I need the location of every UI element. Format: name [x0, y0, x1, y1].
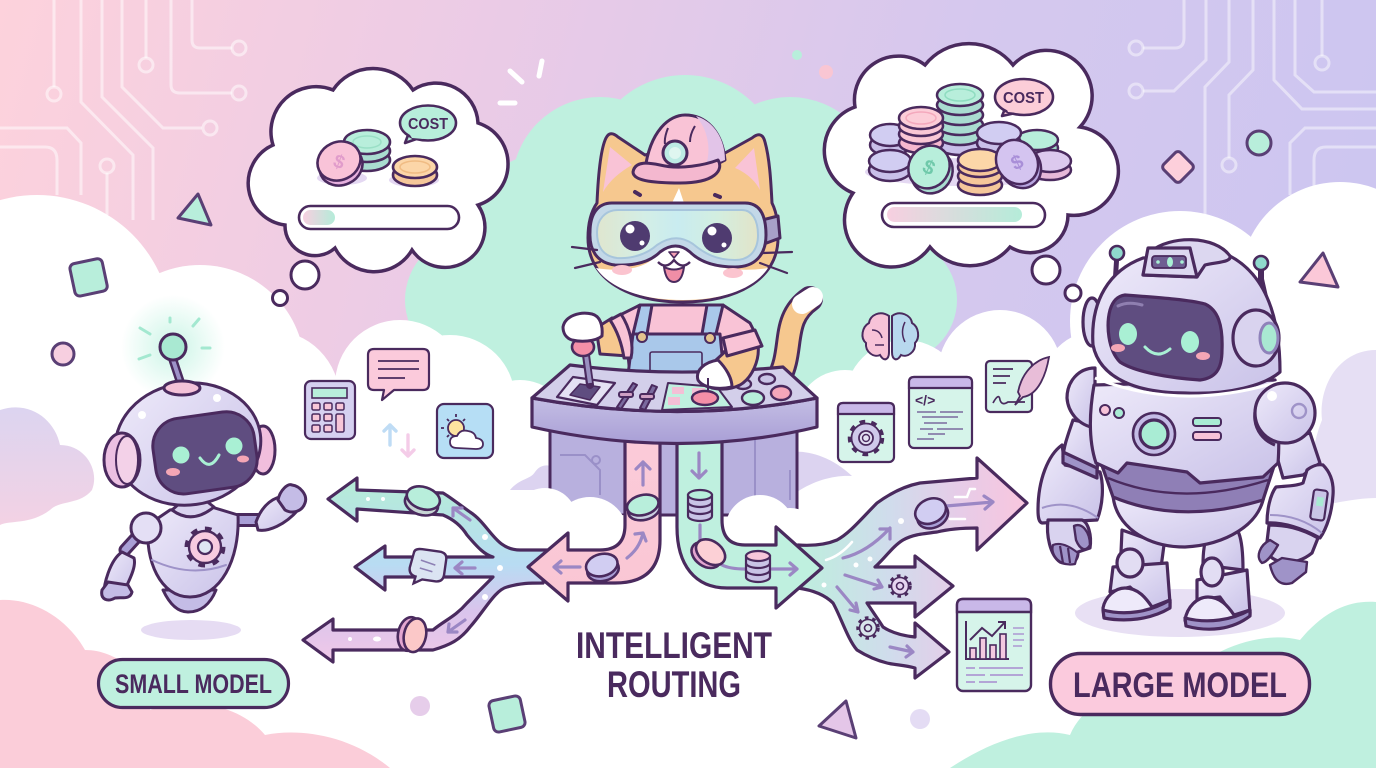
flow arrows: [837, 496, 993, 657]
console top: [532, 365, 817, 412]
circuit traces: top right: [1129, 0, 1376, 215]
triangle lavender bottom: [819, 701, 856, 738]
icon: code window: </>: [915, 392, 935, 408]
small coin pile: [311, 130, 439, 193]
pink route from console to left: [528, 425, 662, 601]
antenna: [173, 360, 181, 384]
antennas: [1115, 253, 1117, 285]
icon: calculator: [305, 381, 355, 439]
thought tail circles: left: [272, 261, 319, 306]
head dome: [1093, 255, 1280, 393]
sliders: [617, 383, 657, 410]
whiskers: [572, 247, 792, 273]
decorative shapes: [52, 131, 1338, 738]
small coin pile: $: [330, 151, 348, 174]
coin lavender: [911, 493, 952, 533]
coin lavender on pink route: [584, 550, 621, 584]
cost bar low: [299, 206, 459, 229]
title: intelligent routing: [576, 625, 772, 705]
icon: weather: [437, 404, 493, 458]
sparkles: [822, 489, 975, 588]
right headphone: [1233, 310, 1279, 366]
left routing branches: [303, 478, 547, 662]
ear right: [251, 426, 275, 474]
face: [1111, 257, 1277, 401]
torso: [148, 505, 238, 597]
large coin pile: $: [1008, 151, 1027, 175]
label: small model: SMALL MODEL: [115, 669, 272, 699]
mint centre cloud: [405, 75, 957, 420]
title: intelligent routing: ROUTING: [607, 664, 741, 705]
label: small model: [98, 660, 288, 708]
head: [107, 373, 269, 515]
right leg: [1203, 523, 1243, 570]
control screen: [662, 383, 732, 410]
flow arrows: [448, 508, 475, 632]
triangle mint left: [178, 194, 211, 225]
thought tail circles: right: [1032, 256, 1081, 301]
visor: [1108, 295, 1222, 380]
left ear: [1083, 298, 1101, 346]
right shoulder: [1255, 395, 1275, 445]
lavender side cloud left: [0, 407, 94, 525]
label: large model: LARGE MODEL: [1073, 666, 1287, 705]
icon: chart window: [957, 599, 1031, 691]
visor: [149, 408, 261, 498]
face: [588, 134, 778, 302]
speech bubble: cost: [400, 106, 456, 143]
head cap: [1143, 240, 1230, 277]
white foreground clouds: [0, 182, 1376, 768]
torso: [1090, 380, 1279, 483]
cheeks: [612, 265, 632, 275]
rays: [139, 318, 210, 359]
cat right arm and paw: [697, 330, 762, 390]
right routing branches: [798, 458, 1027, 678]
sparkle dots: [348, 497, 503, 642]
sparkle dots and ticks: [410, 50, 930, 729]
glow: [121, 295, 225, 399]
goggles: [590, 203, 766, 267]
icon: up and down arrows: [384, 425, 414, 456]
nose and mouth: [669, 252, 679, 258]
cat operator tail: [778, 297, 813, 380]
left arm: [125, 528, 145, 550]
square mint left: [69, 258, 108, 297]
triangle pink right: [1300, 253, 1338, 287]
status bars: [1193, 418, 1221, 426]
cat console base: [550, 430, 797, 515]
coin pink on mint route: [687, 533, 730, 574]
neck: [172, 500, 214, 517]
large robot: [1038, 240, 1333, 637]
status dots: [1100, 405, 1110, 415]
speech bubble: cost: COST: [408, 116, 448, 133]
database icon lower: [746, 551, 770, 582]
circle mint right: [1247, 131, 1271, 155]
console desk: [532, 355, 817, 444]
eyes: [620, 221, 650, 251]
coin pink: [395, 615, 429, 654]
round buttons: [692, 374, 791, 405]
gear lower token: [858, 618, 878, 638]
joystick stick: [586, 355, 590, 385]
icon: quill document: [986, 357, 1049, 412]
right boot: [1185, 597, 1250, 627]
forehead stripes: [635, 192, 720, 197]
right hand: [1266, 525, 1318, 562]
ear left: [104, 433, 140, 487]
large coin pile: $: [919, 156, 938, 180]
shadow: [141, 620, 241, 640]
chat icon token: [408, 548, 447, 587]
white cloud in front of console: [510, 488, 822, 580]
speech bubble: cost: [995, 79, 1053, 116]
joystick base: [557, 377, 615, 405]
mint bottom-right cloud: [950, 602, 1376, 768]
gear mid token: [890, 576, 910, 596]
icon: gear window: [838, 403, 894, 462]
shoulder: [131, 513, 161, 543]
left upper arm: [1063, 420, 1100, 472]
white blaze: [672, 188, 684, 203]
right forearm: [1267, 465, 1333, 538]
left paw: [563, 313, 602, 341]
right upper arm: [1273, 433, 1320, 478]
small cloud wisps behind console: [510, 452, 852, 492]
waist bands: [1100, 460, 1276, 512]
small robot: [102, 295, 306, 640]
thought bubble: large model cost: [824, 44, 1118, 267]
gear emblem: [187, 529, 223, 565]
goggle strap: [762, 216, 780, 244]
thought bubble: small model cost: [248, 69, 508, 272]
database icon upper: [688, 490, 712, 521]
coin mint: [402, 482, 443, 519]
left hand: [1048, 520, 1091, 564]
console front: [532, 398, 817, 444]
left leg: [1120, 530, 1164, 575]
icon: code window: [909, 377, 972, 448]
inner ears: [603, 147, 632, 192]
icon: brain: [862, 313, 918, 359]
lower belly: [1113, 495, 1264, 547]
circuit traces: top left: [0, 0, 246, 220]
lavender side cloud right: [1313, 350, 1376, 503]
mint route from console to right: [677, 425, 822, 608]
coin mint on pink route: [625, 491, 662, 523]
speech bubble: cost: COST: [1003, 90, 1045, 107]
left shoulder: [1067, 368, 1095, 428]
mining hat: [633, 115, 725, 183]
face: [138, 394, 249, 476]
cost bar high: [882, 203, 1045, 227]
left boot: [1103, 588, 1170, 618]
icon: chat bubble: [368, 349, 429, 400]
large coin pile: [865, 84, 1071, 201]
square mint bottom: [488, 695, 526, 733]
label: large model: [1050, 654, 1310, 714]
bottom cap: [163, 590, 216, 612]
cat body with overalls: [610, 305, 760, 376]
shadow: [1075, 589, 1285, 637]
core light: [1133, 413, 1175, 455]
left forearm: [1038, 445, 1102, 523]
cat left arm and joystick: [563, 313, 632, 358]
circle pink left: [52, 343, 74, 365]
diamond pink right: [1161, 150, 1195, 184]
pink bottom-left cloud: [0, 600, 390, 768]
title: intelligent routing: INTELLIGENT: [576, 625, 772, 666]
cat head: [572, 115, 792, 302]
right arm: [238, 513, 258, 527]
